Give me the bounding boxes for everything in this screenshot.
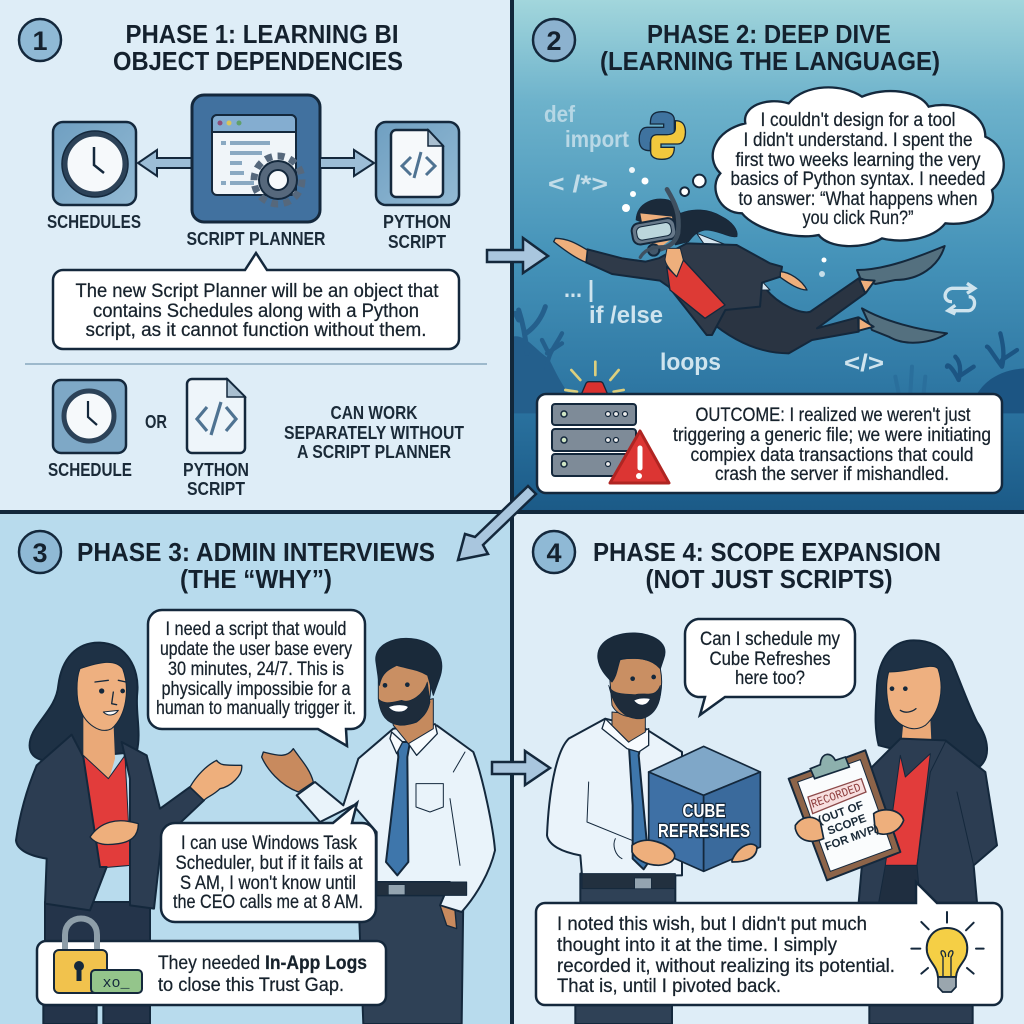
speech bubble: cube refresh question: here too? <box>735 668 805 689</box>
man figure <box>262 638 495 1024</box>
callout: in-app logs: They needed In-App Logs <box>158 953 367 974</box>
speech bubble: admin script request: 30 minutes, 24/7. This is <box>168 659 344 680</box>
callout: outcome: compiex data transactions that could <box>690 445 974 466</box>
text: can work separately <box>284 403 464 462</box>
phase 1 number badge <box>19 19 61 61</box>
cube: cube refreshes <box>632 746 760 871</box>
panel: phase 4 <box>512 512 1024 1024</box>
callout: in-app logs: to close this Trust Gap. <box>158 975 344 996</box>
phase 2 heading: PHASE 2: DEEP DIVE <box>647 19 891 49</box>
thought cloud: to answer: “What happens when <box>738 189 978 210</box>
woman with jacket <box>859 640 997 1024</box>
icon: python logo <box>639 112 685 159</box>
phase 1 heading: OBJECT DEPENDENCIES <box>113 46 403 76</box>
arrow: planner to schedules <box>138 150 192 176</box>
label: python script lower: SCRIPT <box>187 479 245 499</box>
speech bubble: task scheduler: Scheduler, but if it fails at <box>176 853 363 874</box>
phase 1 heading: PHASE 1: LEARNING BI <box>126 19 398 49</box>
callout: script planner definition: script, as it cannot function without them. <box>86 320 426 341</box>
thought cloud: you click Run?” <box>802 208 914 229</box>
phase 1 number badge: 1 <box>32 26 48 56</box>
speech bubble: admin script request: human to manually trigger it. <box>156 698 356 719</box>
phase 2 number badge <box>533 19 575 61</box>
floating code words: </> <box>844 350 884 377</box>
icon: loop arrows <box>945 283 975 314</box>
diver illustration <box>554 189 947 353</box>
text: can work separately: SEPARATELY WITHOUT <box>284 423 464 443</box>
floating code words: if /else <box>589 302 663 329</box>
phase 4 heading: PHASE 4: SCOPE EXPANSION <box>593 537 941 567</box>
speech bubble: task scheduler: S AM, I won't know until <box>180 873 356 894</box>
callout: in-app logs <box>37 941 386 1005</box>
label: python script: SCRIPT <box>388 232 446 252</box>
speech bubble: admin script request: I need a script that would <box>166 619 346 640</box>
callout: recorded wish: thought into it at the time. I simply <box>557 935 837 956</box>
icon: python script file <box>376 122 459 205</box>
label: python script lower <box>183 460 249 499</box>
thought cloud: basics of Python syntax. I needed <box>730 169 986 190</box>
speech bubble: admin script request: update the user base every <box>160 639 352 660</box>
cube: cube refreshes: CUBE <box>682 801 726 821</box>
woman figure <box>16 643 242 1024</box>
floating code words: loops <box>660 349 721 376</box>
cube: cube refreshes: REFRESHES <box>658 821 750 841</box>
speech bubble: cube refresh question: Can I schedule my <box>700 629 840 650</box>
callout: recorded wish: recorded it, without realizing its potential. <box>557 956 895 977</box>
speech bubble: task scheduler: I can use Windows Task <box>181 833 357 854</box>
icon: schedules clock <box>53 122 136 205</box>
phase 3 number badge <box>19 531 61 573</box>
man holding cube <box>547 633 682 1024</box>
text: can work separately: CAN WORK <box>330 403 418 423</box>
speech bubble: task scheduler <box>161 803 376 922</box>
callout: outcome: crash the server if mishandled. <box>715 464 949 485</box>
label: python script: PYTHON <box>383 212 451 232</box>
phase 3 number badge: 3 <box>32 538 48 568</box>
phase 4 number badge: 4 <box>546 538 562 568</box>
callout: recorded wish: I noted this wish, but I didn't put much <box>557 914 867 935</box>
icon: padlock and terminal <box>54 918 142 993</box>
clipboard: SCOPE <box>826 813 868 838</box>
thought cloud <box>680 87 1004 246</box>
phase 4 heading <box>593 537 941 594</box>
callout: script planner definition <box>53 253 459 349</box>
phase 3 heading <box>77 537 435 594</box>
label: python script lower: PYTHON <box>183 460 249 480</box>
clipboard: FOR MVP) <box>824 823 881 853</box>
phase 3 heading: PHASE 3: ADMIN INTERVIEWS <box>77 537 435 567</box>
reef silhouettes <box>512 307 1024 413</box>
callout: recorded wish <box>536 882 1002 1005</box>
speech bubble: admin script request <box>148 610 365 746</box>
phase 2 heading <box>600 19 940 76</box>
label: script planner: SCRIPT PLANNER <box>186 229 326 249</box>
arrow: phase 3 to phase 4 <box>492 751 550 785</box>
bubbles <box>622 167 826 277</box>
panel: phase 2 <box>512 0 1024 512</box>
thought cloud: I couldn't design for a tool <box>760 110 956 131</box>
floating code words: import <box>565 126 629 152</box>
phase 2 heading: (LEARNING THE LANGUAGE) <box>600 46 940 76</box>
callout: script planner definition: contains Schedules along with a Python <box>93 301 419 322</box>
arrow: planner to python script <box>320 150 374 176</box>
phase 3 heading: (THE “WHY”) <box>180 564 332 594</box>
icon: python file <box>187 379 245 453</box>
phase 2 number badge: 2 <box>546 26 562 56</box>
speech bubble: cube refresh question <box>685 619 855 715</box>
callout: script planner definition: The new Script Planner will be an object that <box>76 281 439 302</box>
panel: phase 3 <box>0 512 512 1024</box>
clipboard: (OUT OF <box>817 799 865 827</box>
label: or: OR <box>145 412 167 432</box>
phase 4 heading: (NOT JUST SCRIPTS) <box>646 564 892 594</box>
clipboard <box>789 750 904 880</box>
arrow: phase 2 to phase 3 <box>458 486 536 560</box>
callout: recorded wish: That is, until I pivoted back. <box>557 976 781 997</box>
speech bubble: admin script request: physically impossibie for a <box>162 679 351 700</box>
speech bubble: task scheduler: the CEO calls me at 8 AM. <box>173 892 363 913</box>
floating code words: def <box>544 101 575 127</box>
floating code words: ... | <box>564 276 594 302</box>
callout: outcome: triggering a generic file; we were initiating <box>673 425 991 446</box>
icon: schedule clock <box>53 380 126 453</box>
phase 4 number badge <box>533 531 575 573</box>
panel: phase 1 <box>0 0 512 512</box>
floating code words: < /*> <box>548 171 608 198</box>
thought cloud: first two weeks learning the very <box>736 150 981 171</box>
thought cloud: I didn't understand. I spent the <box>744 130 972 151</box>
icon: script planner <box>192 95 320 222</box>
callout: outcome <box>537 394 1002 493</box>
clipboard: RECORDED <box>809 781 863 812</box>
label: schedules: SCHEDULES <box>47 212 141 232</box>
icon: server with warning <box>552 404 669 483</box>
text: can work separately: A SCRIPT PLANNER <box>297 442 451 462</box>
label: schedule: SCHEDULE <box>48 460 132 480</box>
icon: alarm light <box>565 362 624 397</box>
callout: outcome: OUTCOME: I realized we weren't just <box>696 405 971 426</box>
floating code words <box>544 101 884 377</box>
arrow: phase 1 to phase 2 <box>487 238 548 273</box>
label: python script <box>383 212 451 252</box>
icon: light bulb <box>911 912 984 992</box>
phase 1 heading <box>113 19 403 76</box>
speech bubble: cube refresh question: Cube Refreshes <box>710 649 830 670</box>
icon: padlock and terminal: xo_ <box>102 975 130 992</box>
